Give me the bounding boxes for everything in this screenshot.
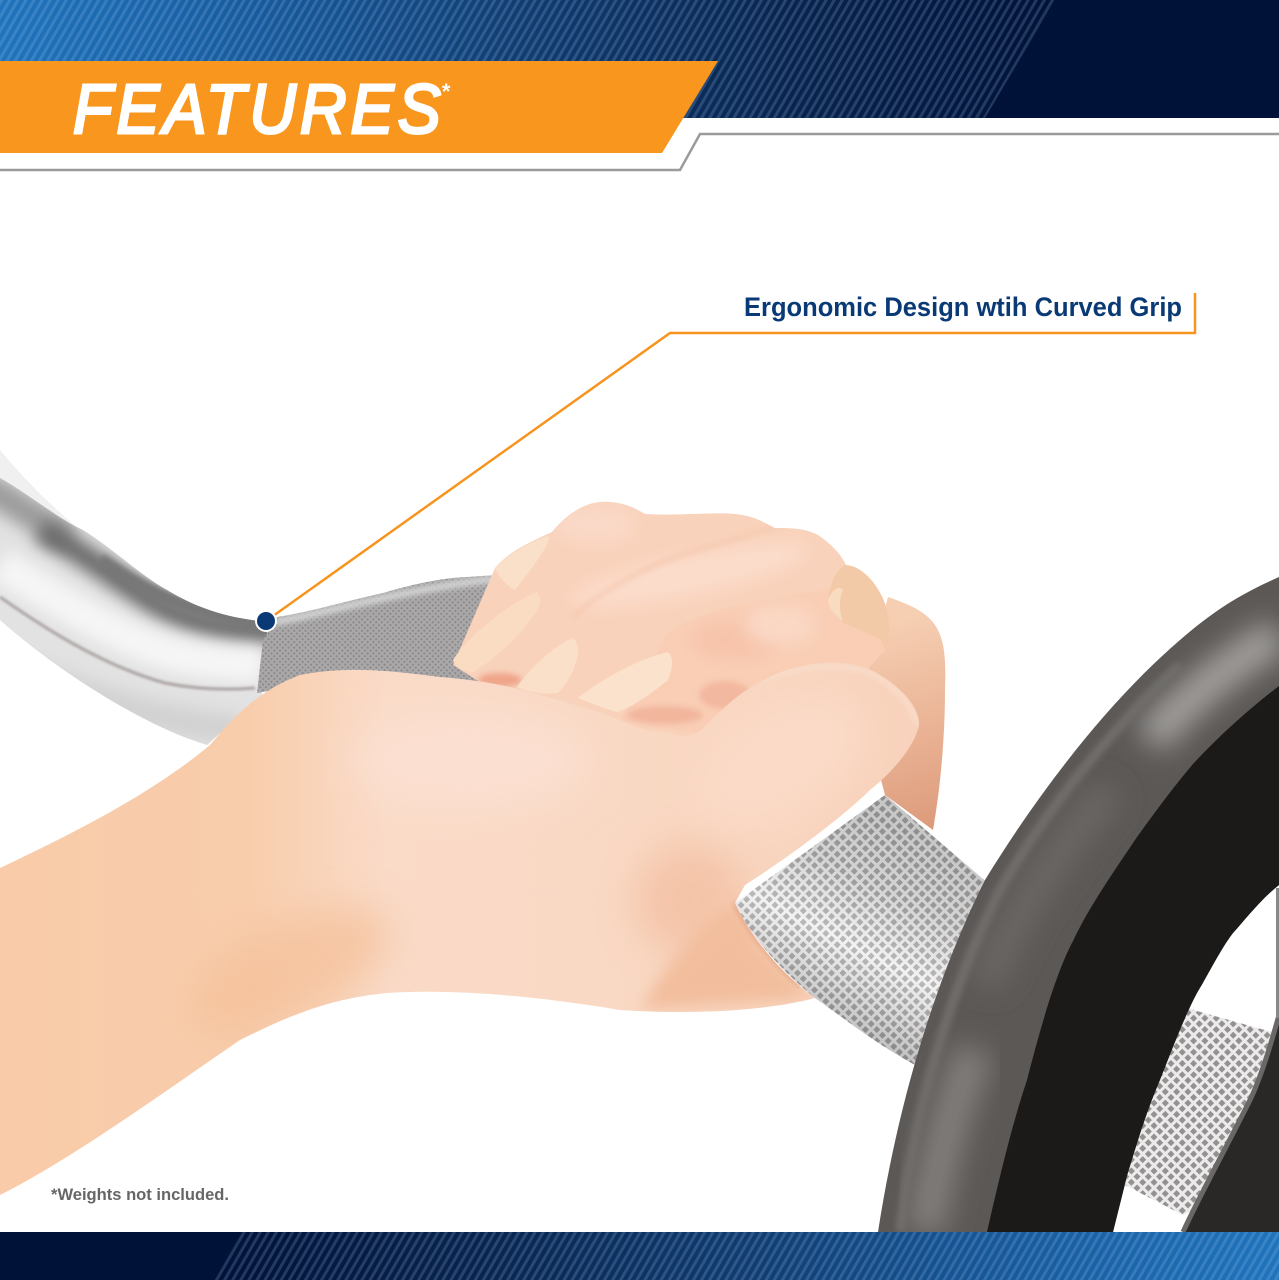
callout label: Ergonomic Design wtih Curved Grip: [744, 292, 1182, 322]
photo: fingers: [453, 502, 900, 745]
near edge of plate: [1183, 1015, 1279, 1232]
bottom band: [0, 1232, 1279, 1280]
callout dot: [255, 610, 277, 632]
knurled bar behind plate: [1110, 1005, 1279, 1215]
photo: hand and arm: [0, 663, 919, 1195]
asterisk: *: [441, 79, 451, 104]
title banner: [0, 61, 718, 153]
plate hole: [1113, 885, 1279, 1232]
title: FEATURES: [73, 71, 445, 149]
callout leader line: [266, 293, 1195, 621]
photo: weight plate: [878, 577, 1279, 1232]
plate inner black face: [987, 686, 1279, 1232]
photo: curved chrome bar: [0, 450, 280, 745]
white swoosh and grey rule under header: [0, 118, 1279, 200]
photo: knurled bar lower: [735, 795, 1000, 1065]
photo: back finger: [860, 597, 945, 830]
top header band: [0, 0, 1279, 118]
photo: grip knurling: [257, 575, 492, 693]
icon: fingernails: [453, 536, 889, 712]
footnote: *Weights not included.: [51, 1185, 229, 1204]
